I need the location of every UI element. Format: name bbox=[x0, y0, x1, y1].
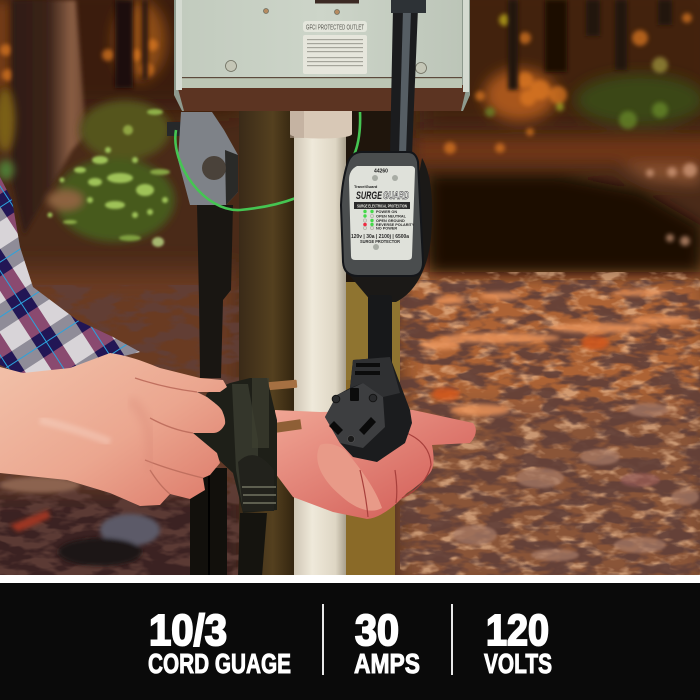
spec: cord gauge bbox=[148, 606, 291, 679]
LED status list: OPEN NEUTRAL bbox=[376, 214, 407, 218]
spec: amps bbox=[354, 606, 420, 679]
white divider strip bbox=[0, 575, 700, 583]
electrical box bbox=[174, 0, 470, 111]
surge protector device: 44260 bbox=[374, 168, 388, 174]
spec: cord gauge: 10/3 bbox=[149, 606, 227, 655]
lower left ground debris bbox=[0, 477, 160, 566]
lower cord bbox=[368, 295, 392, 365]
far hand: palm and thumb bbox=[275, 410, 476, 519]
rear black cables and bracket bbox=[167, 112, 238, 576]
wooden post bbox=[239, 108, 400, 576]
green wire bbox=[175, 112, 360, 210]
surge protector device: SURGE ELECTRICAL PROTECTION bbox=[357, 204, 407, 208]
spec bar bbox=[0, 583, 700, 700]
upper power cord bbox=[390, 0, 426, 155]
GFCI label: GFCI PROTECTED OUTLET bbox=[306, 22, 364, 32]
ground leaves texture bbox=[400, 272, 700, 576]
male plug with prongs bbox=[190, 378, 302, 576]
LED status list: REVERSE POLARITY bbox=[376, 223, 415, 227]
LED status list bbox=[363, 210, 415, 230]
spec: amps: 30 bbox=[355, 606, 399, 655]
orange highlights on the ground bbox=[420, 290, 690, 416]
LED status list: POWER ON bbox=[376, 210, 397, 214]
brand name: SURGE bbox=[356, 190, 382, 202]
surge protector device: SURGE PROTECTOR bbox=[360, 239, 401, 244]
female plug held in hand bbox=[325, 357, 412, 462]
LED status list: OPEN GROUND bbox=[376, 219, 405, 223]
spec: amps: AMPS bbox=[354, 648, 420, 679]
tree trunks bbox=[12, 0, 672, 235]
LED status list: NO POWER bbox=[376, 226, 397, 230]
GFCI label bbox=[303, 21, 367, 74]
pale fallen leaves bbox=[453, 403, 699, 561]
plaid shirt sleeve bbox=[0, 170, 145, 380]
near hand gripping plug bbox=[0, 353, 227, 506]
green foliage bbox=[0, 88, 175, 247]
spec: volts bbox=[484, 606, 552, 679]
surge protector device: TravelGuard bbox=[354, 184, 378, 189]
spec: volts: VOLTS bbox=[484, 648, 552, 679]
brand name: GUARD bbox=[383, 190, 409, 202]
divider bbox=[451, 604, 453, 675]
screws bbox=[226, 8, 426, 74]
divider bbox=[322, 604, 324, 675]
spec: cord gauge: CORD GUAGE bbox=[148, 648, 291, 679]
surge protector device bbox=[341, 152, 432, 302]
white PVC pipe bbox=[290, 96, 352, 576]
surge protector device: 120v | 30a | 2100j | 6500a bbox=[351, 234, 409, 240]
spec: volts: 120 bbox=[486, 606, 549, 655]
forest bokeh bbox=[0, 13, 697, 246]
